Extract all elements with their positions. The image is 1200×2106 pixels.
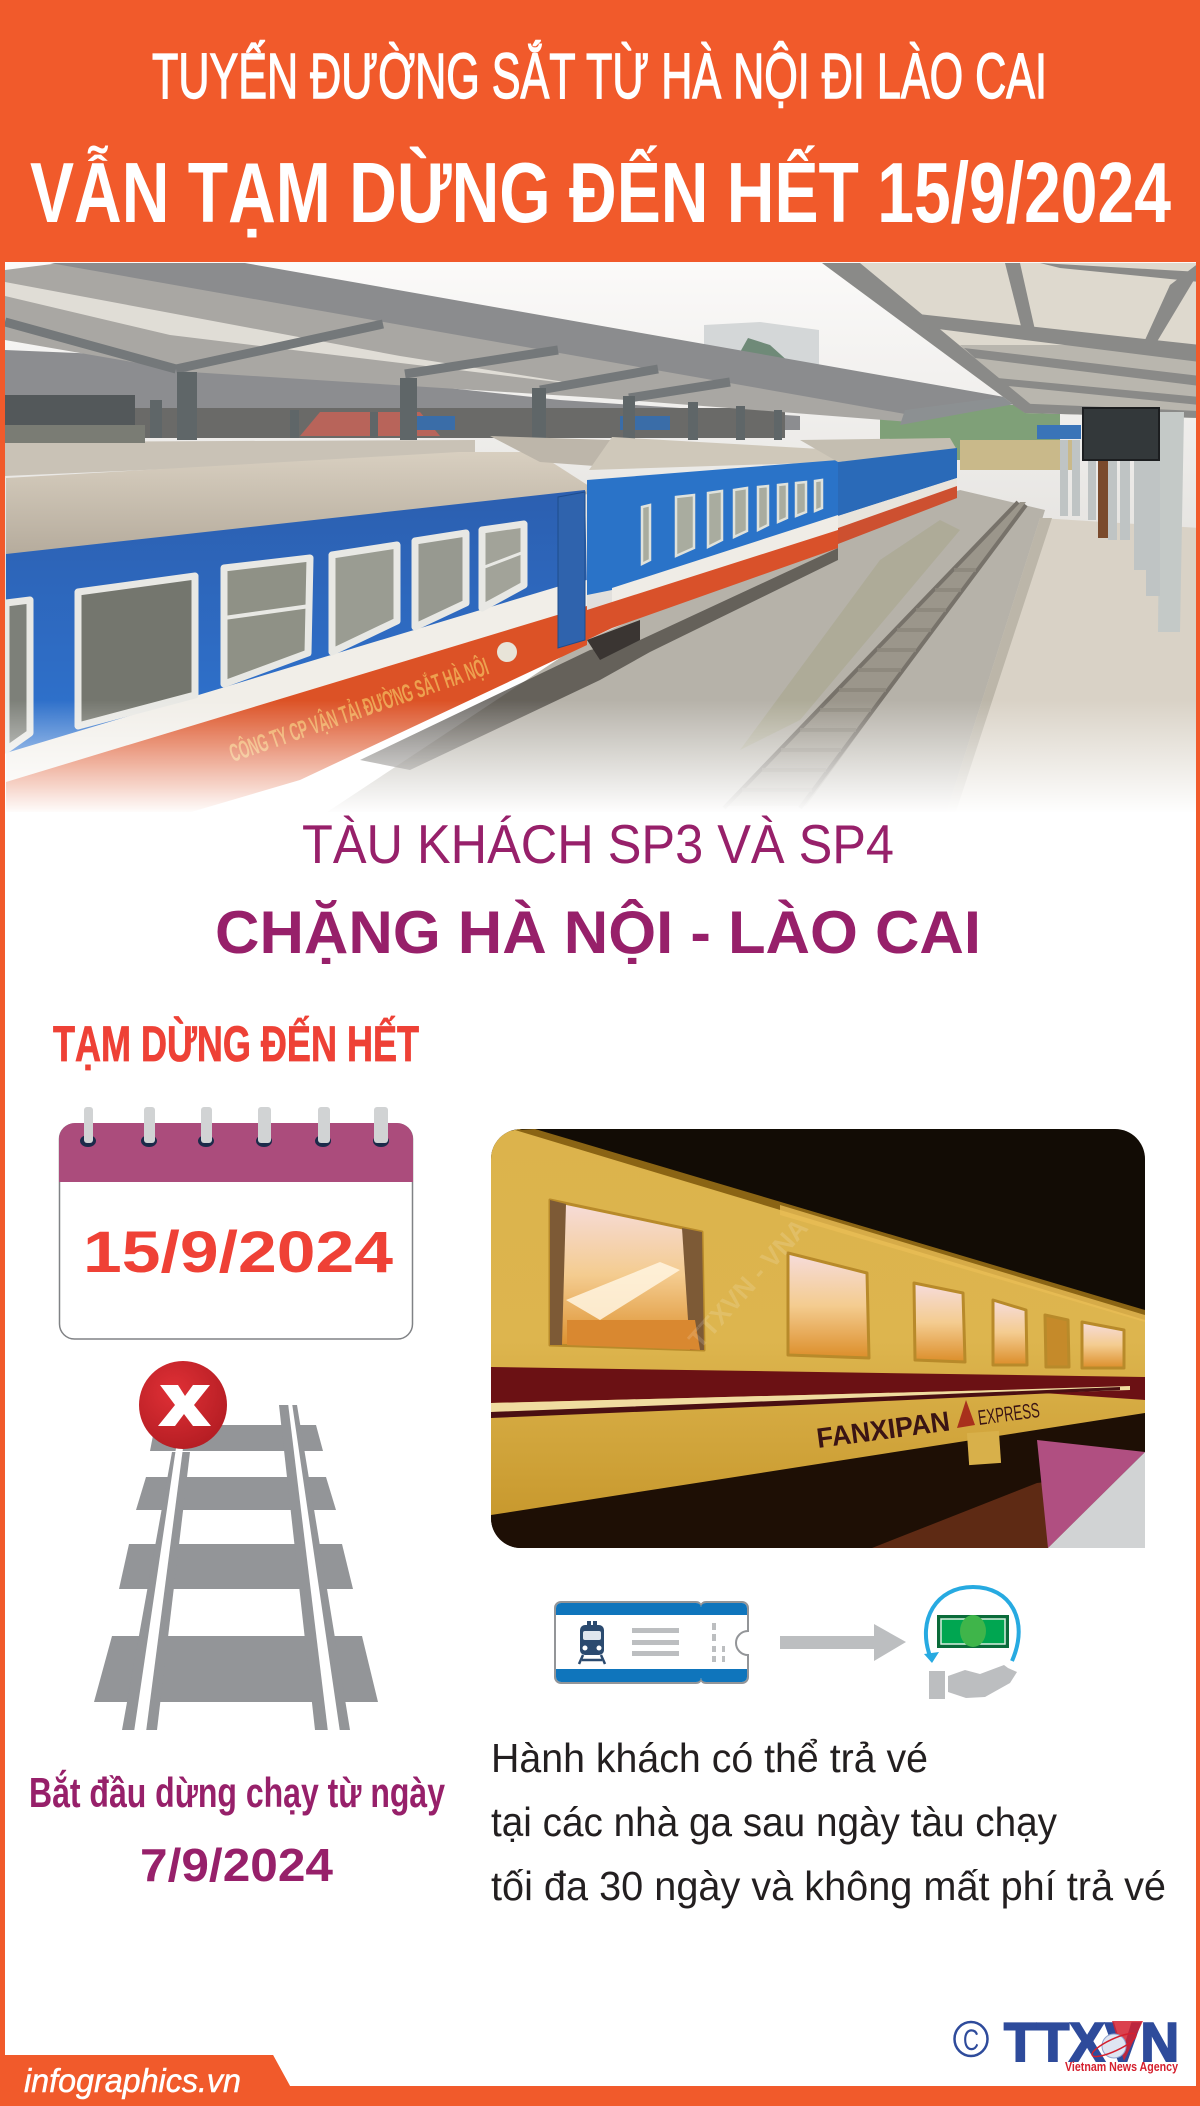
stop badge: [139, 1361, 227, 1449]
far platform roof: [5, 350, 800, 430]
subtitle line 2: CHẶNG HÀ NỘI - LÀO CAI: [215, 899, 981, 966]
header banner: [0, 0, 1200, 262]
calendar date: 15/9/2024: [83, 1220, 393, 1285]
calendar: [59, 1107, 413, 1339]
refund line 2: tại các nhà ga sau ngày tàu chạy: [491, 1799, 1057, 1845]
undercarriage shadow: [360, 548, 838, 770]
platform right: [961, 518, 1196, 798]
railway track: [724, 502, 1026, 808]
refund line 1: Hành khách có thể trả vé: [491, 1735, 928, 1781]
near platform wall: [5, 440, 475, 476]
heading: suspended until: TẠM DỪNG ĐẾN HẾT: [53, 1016, 419, 1072]
carriage door: [558, 492, 585, 648]
website footer: infographics.vn: [24, 2062, 241, 2099]
maroon stripe: [491, 1367, 1145, 1403]
rear carriages: [800, 438, 957, 462]
lettering FANXIPAN: FANXIPAN: [815, 1405, 952, 1454]
icon: money refund in hand: [924, 1587, 1019, 1699]
carriage underside: [967, 1431, 1001, 1465]
lettering EXPRESS: EXPRESS: [977, 1399, 1041, 1430]
page corner fold: [1037, 1440, 1145, 1548]
left canopy: [5, 264, 904, 422]
windows: [550, 1200, 1124, 1368]
first carriage: [6, 452, 589, 556]
photo: blue passenger train at station: [0, 262, 1200, 830]
refund line 3: tối đa 30 ngày và không mất phí trả vé: [491, 1863, 1166, 1909]
start date label: Bắt đầu dừng chạy từ ngày: [29, 1768, 445, 1816]
right canopy: [822, 263, 1200, 418]
carriage body: [491, 1129, 1145, 1515]
photo: Fanxipan Express carriage at night: [491, 1129, 1145, 1548]
logo triangle: [957, 1400, 975, 1428]
gravel and ground: [342, 490, 1045, 804]
station pillars: [1060, 412, 1184, 632]
icon: train ticket: [555, 1602, 748, 1683]
subheading: [215, 813, 981, 966]
copyright mark: [954, 2022, 988, 2057]
second carriage: [589, 437, 838, 470]
banknote: [937, 1615, 1009, 1648]
ticket train symbol: [579, 1621, 605, 1664]
ground: [491, 1400, 1145, 1548]
agency name: Vietnam News Agency: [1065, 2059, 1179, 2074]
start date text: [29, 1768, 445, 1891]
start date value: 7/9/2024: [140, 1839, 333, 1891]
TTXVN logo: [954, 2011, 1179, 2074]
photo watermark: TTXVN - VNA: [682, 1212, 814, 1354]
hand: [929, 1665, 1017, 1699]
refund information text: [491, 1735, 1166, 1909]
copyright mark: C: [963, 2024, 979, 2057]
agency wordmark: TTXVN: [1004, 2011, 1179, 2073]
carriage windows: [6, 524, 524, 750]
arrow: ticket to refund: [780, 1624, 906, 1661]
icon: railway track with stop badge: [94, 1361, 378, 1732]
circular arrow: [926, 1587, 1019, 1661]
website footer: [0, 2055, 1200, 2106]
station screen: [1083, 408, 1159, 460]
white fade: [0, 700, 1200, 814]
carriage lettering: CÔNG TY CP VẬN TẢI ĐƯỜNG SẮT HÀ NỘI: [225, 651, 492, 768]
subtitle line 1: TÀU KHÁCH SP3 VÀ SP4: [302, 813, 894, 875]
